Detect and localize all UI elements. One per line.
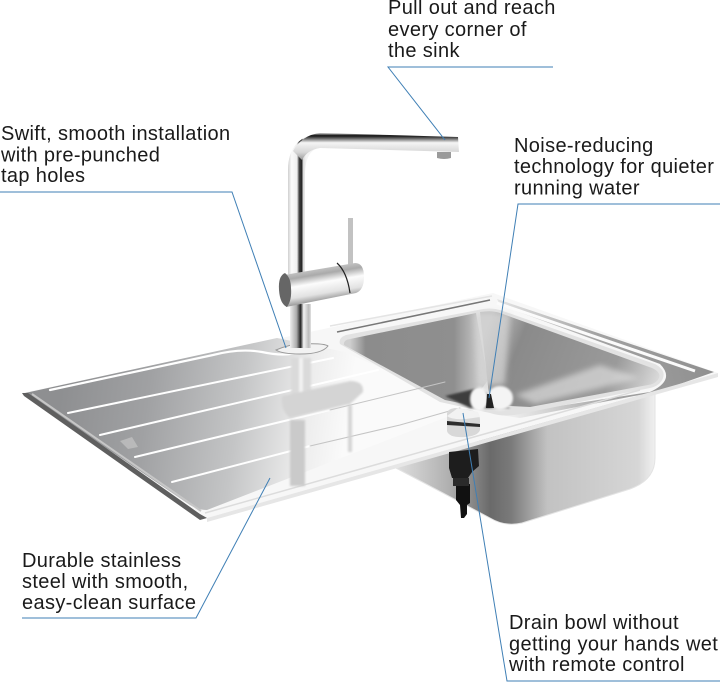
callout: drain remote: Drain bowl without [509, 612, 679, 634]
tap reflection on drainer [282, 358, 363, 486]
leader: pull out [388, 67, 553, 140]
pipe top [449, 449, 479, 478]
drain remote button [447, 408, 480, 437]
faucet base plate [276, 344, 328, 354]
faucet lower column [290, 304, 311, 348]
mixer seam [337, 263, 350, 293]
outlet right highlight [487, 386, 513, 410]
groove 3 [100, 370, 378, 435]
drainer grooves [50, 351, 460, 482]
reflected lower column [290, 420, 305, 486]
outlet centre [486, 394, 494, 408]
leader: noise reducing [489, 204, 720, 398]
logo mark on drainer [120, 437, 138, 449]
mixer body [284, 263, 364, 307]
button body [447, 408, 480, 437]
front edge line [205, 390, 640, 513]
mixer end cap [279, 273, 291, 307]
button band [447, 421, 480, 427]
top rim edge [337, 300, 490, 332]
bowl rim [340, 308, 664, 416]
pipe neck [453, 478, 469, 486]
leader: drain remote [463, 413, 720, 681]
front edge [207, 373, 718, 522]
spout arm [293, 133, 459, 160]
callout: installation: Swift, smooth installation [1, 123, 230, 145]
spout nozzle [437, 152, 451, 159]
top groove [50, 351, 300, 390]
left edge strip [22, 393, 207, 520]
bowl opening [340, 308, 664, 416]
groove 2 [68, 358, 333, 413]
reflected column [291, 358, 311, 395]
bowl left wall [344, 313, 488, 405]
reflected column stripe [299, 358, 303, 395]
draining board surface [25, 338, 470, 510]
faucet riser [288, 133, 340, 274]
bowl right wall [480, 311, 659, 407]
callout: installation: tap holes [1, 165, 85, 187]
right rim band [497, 299, 714, 418]
groove 4 [135, 410, 330, 457]
faucet [276, 133, 459, 354]
callout: noise reducing: running water [514, 178, 640, 200]
outlet shadow [445, 388, 510, 408]
top rim highlight [330, 296, 492, 326]
groove 5 [172, 446, 310, 482]
callout: noise reducing: technology for quieter [514, 156, 714, 178]
reflected mixer [282, 381, 363, 418]
leader: stainless steel [22, 478, 270, 618]
waste outlet [445, 386, 513, 411]
callout: stainless steel: Durable stainless [22, 550, 182, 572]
callout: drain remote: with remote control [508, 654, 685, 676]
groove 5 light [310, 408, 460, 446]
waste pipe fitting [449, 449, 479, 518]
callout: drain remote: getting your hands wet [509, 634, 718, 656]
bowl outer wall [396, 390, 655, 524]
bowl corner streak [474, 314, 510, 385]
callout: stainless steel: steel with smooth, [22, 571, 189, 593]
leader: installation [0, 192, 286, 348]
reflected lever [348, 405, 352, 452]
callout: stainless steel: easy-clean surface [22, 592, 196, 614]
groove 4 light [330, 382, 445, 410]
callout: installation: with pre-punched [0, 144, 160, 166]
callout: pull out: the sink [388, 40, 460, 62]
button top [447, 408, 480, 419]
sink top plate [22, 293, 718, 518]
lever handle [348, 218, 353, 265]
pipe stem [456, 484, 470, 518]
callout: noise reducing: Noise-reducing [514, 135, 654, 157]
bowl floor reflection [515, 365, 640, 404]
callout: pull out: every corner of [388, 19, 527, 41]
kitchen sink product [22, 133, 718, 524]
outlet left highlight [470, 387, 488, 411]
left inner edge [32, 394, 201, 511]
right rim highlight [497, 303, 695, 371]
